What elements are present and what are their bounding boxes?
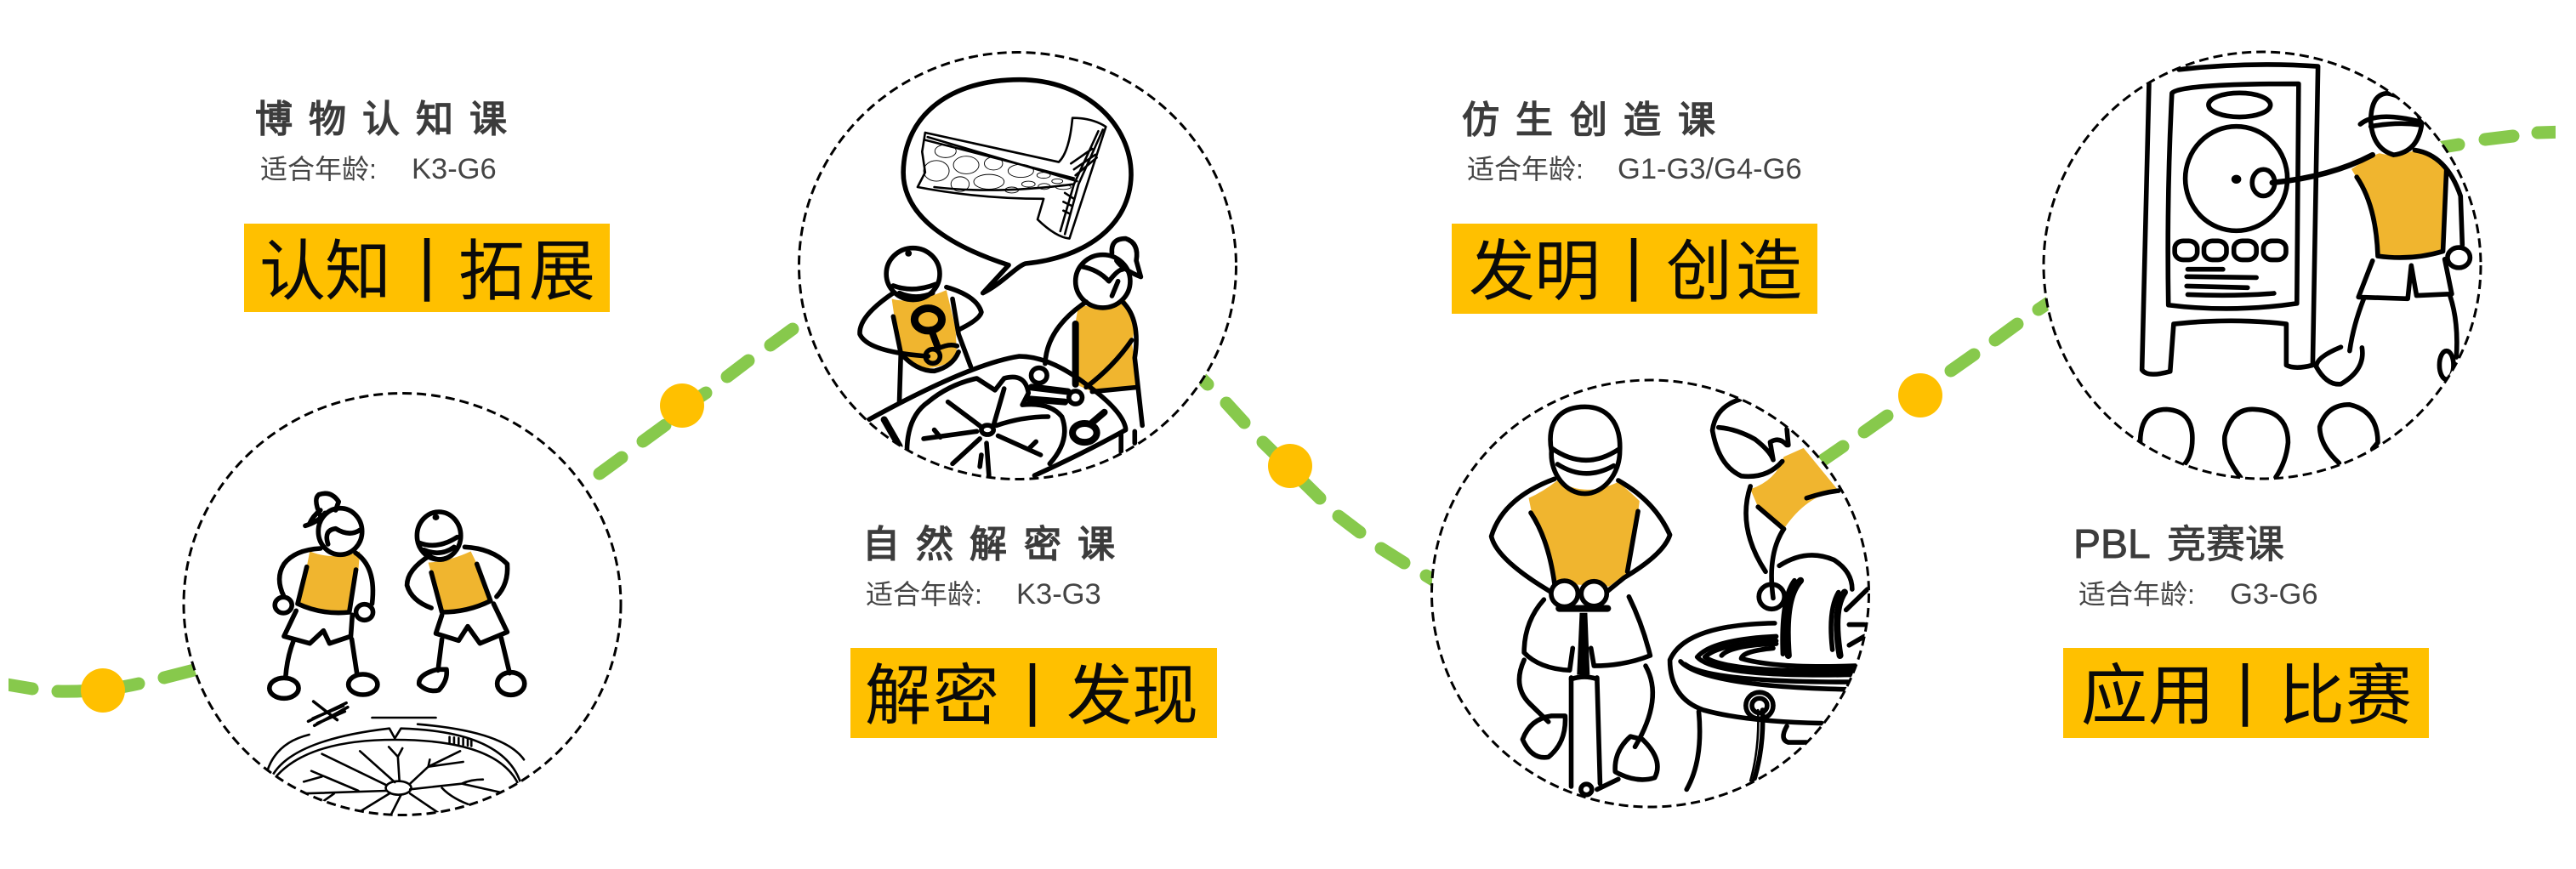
figure: child at pottery wheel <box>1713 400 1868 656</box>
lily pad <box>267 718 524 819</box>
heading: PBL 竞赛课: 赛 <box>2206 522 2245 566</box>
heading: PBL 竞赛课: 竞 <box>2167 522 2206 566</box>
tag: 解密 | 发现: 解密 <box>865 643 999 738</box>
panel: course 2 text <box>850 524 1217 738</box>
tag: 发明 | 创造 <box>1452 219 1817 314</box>
tag: 应用 | 比赛: 应用 <box>2081 643 2215 738</box>
tag: 解密 | 发现 <box>850 643 1217 738</box>
panel: course 4 text <box>2063 522 2429 738</box>
heading: 仿生创造课: 仿生创造课 <box>1462 99 1715 141</box>
tag: 应用 | 比赛: 比赛 <box>2278 643 2412 738</box>
figure: boy <box>407 512 525 695</box>
pottery wheel <box>1670 623 1855 789</box>
panel: circle illustration 3, children pumping and pottery wheel <box>1432 380 1869 807</box>
panel: course 1 text <box>244 99 610 314</box>
age range: K3-G3: 适合年龄: <box>866 579 982 610</box>
poster board <box>2142 65 2318 374</box>
panel: circle illustration 2, children studying with speech bubble <box>799 53 1237 480</box>
tag: 应用 | 比赛 <box>2063 643 2429 738</box>
icon: dragonfly <box>308 701 348 725</box>
audience heads <box>2141 405 2378 477</box>
age range: G3-G6: 适合年龄: <box>2078 579 2195 610</box>
heading: 自然解密课: 自然解密课 <box>862 524 1115 565</box>
heading: PBL 竞赛课: PBL <box>2073 522 2151 567</box>
figure: girl with magnifier <box>1045 239 1142 452</box>
tag: 发明 | 创造: 发明 <box>1469 219 1601 314</box>
tag: 应用 | 比赛: | <box>2237 651 2254 727</box>
table with lily pad specimen <box>869 356 1126 475</box>
tag: 解密 | 发现: 发现 <box>1066 643 1198 738</box>
tag: 认知 | 拓展: 拓展 <box>458 219 595 314</box>
tag: 认知 | 拓展: 认知 <box>259 219 391 314</box>
age range: G3-G6: G3-G6 <box>2230 578 2318 611</box>
age range: K3-G6: 适合年龄: <box>260 154 377 185</box>
age range: G1-G3/G4-G6: 适合年龄: <box>1467 154 1584 185</box>
age range: K3-G3: K3-G3 <box>1016 578 1101 611</box>
figure: presenter <box>2252 94 2470 384</box>
heading: PBL 竞赛课: 课 <box>2245 522 2284 566</box>
heading: 博物认知课: 博物认知课 <box>255 99 507 140</box>
timeline node dots <box>81 373 1942 713</box>
figure: boy with magnifier <box>860 248 981 402</box>
tag: 发明 | 创造: 创造 <box>1666 219 1802 314</box>
tag: 发明 | 创造: | <box>1625 226 1642 302</box>
dashed green timeline path <box>2 132 2564 691</box>
figure: girl <box>270 493 378 698</box>
tag: 认知 | 拓展: | <box>418 226 435 302</box>
tag: 解密 | 发现: | <box>1024 651 1041 727</box>
panel: course 3 text <box>1452 99 1817 314</box>
tag: 认知 | 拓展 <box>244 219 610 314</box>
age range: G1-G3/G4-G6: G1-G3/G4-G6 <box>1618 153 1802 185</box>
figure: child with air pump <box>1492 406 1670 795</box>
panel: circle illustration 4, child presenting a poster <box>2044 52 2481 479</box>
speech bubble with leaf cross-section <box>903 80 1131 293</box>
panel: circle illustration 1, two children and lily pad <box>184 393 621 819</box>
age range: K3-G6: K3-G6 <box>412 153 497 185</box>
